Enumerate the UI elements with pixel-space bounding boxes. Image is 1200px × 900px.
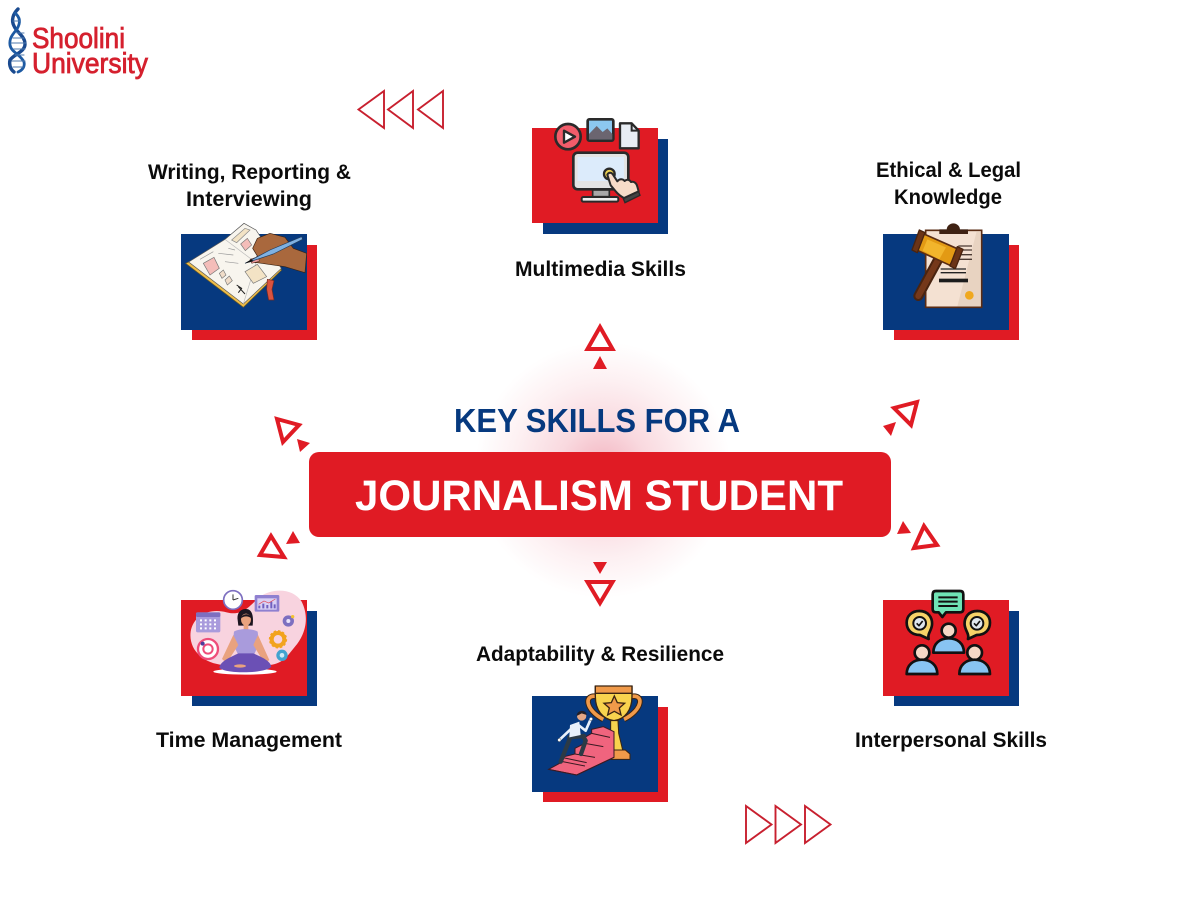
- card back: [543, 139, 668, 234]
- arrows: top-left triple chevrons: [358, 91, 443, 128]
- logo: Shoolini University: [10, 9, 148, 80]
- card front: [532, 696, 658, 792]
- panel: Ethical and Legal Knowledge: [876, 159, 1021, 340]
- arrow: down-right to Interpersonal Skills: [897, 521, 937, 548]
- icon: DNA helix: [10, 9, 26, 72]
- arrow: up to Multimedia Skills: [588, 327, 612, 369]
- panel: Writing, Reporting and Interviewing: [148, 161, 351, 340]
- heading: Time Management: Time Management: [156, 729, 342, 752]
- panel: Interpersonal Skills: [855, 591, 1047, 752]
- logo wordmark: Shoolini: [32, 23, 125, 55]
- arrow: up-right to Ethical and Legal Knowledge: [883, 402, 917, 436]
- arrow: down to Adaptability and Resilience: [588, 562, 612, 603]
- card front: [181, 600, 307, 696]
- logo wordmark: [32, 23, 148, 80]
- arrows: bottom-right triple chevrons: [746, 806, 830, 843]
- icon: media files and touch screen monitor: [555, 119, 640, 203]
- arrow: down-left to Time Management: [260, 531, 300, 557]
- card back: [894, 245, 1019, 340]
- heading: KEY SKILLS FOR A: KEY SKILLS FOR A: [454, 402, 740, 439]
- card front: [181, 234, 307, 330]
- icon: gavel and legal clipboard: [912, 223, 982, 307]
- card front: [883, 234, 1009, 330]
- heading: Writing, Reporting and Interviewing: Writing, Reporting &: [148, 161, 351, 184]
- panel: Adaptability and Resilience: [476, 643, 724, 802]
- panel: Time Management: [156, 591, 342, 752]
- heading: Writing, Reporting and Interviewing: [148, 161, 351, 211]
- logo wordmark: University: [32, 48, 148, 80]
- banner background: [309, 452, 891, 537]
- card back: [543, 707, 668, 802]
- banner text: JOURNALISM STUDENT: [355, 472, 843, 520]
- icon: person climbing stairs to trophy: [549, 686, 640, 775]
- heading: Ethical and Legal Knowledge: Ethical & Legal: [876, 159, 1021, 182]
- card front: [532, 128, 658, 223]
- icon: notebook and writing hand: [186, 223, 307, 307]
- heading: Adaptability and Resilience: Adaptability & Resilience: [476, 643, 724, 666]
- heading: Multimedia Skills: Multimedia Skills: [515, 258, 686, 281]
- heading: Interpersonal Skills: Interpersonal Skills: [855, 729, 1047, 752]
- panel: Multimedia Skills: [515, 119, 686, 281]
- card back: [894, 611, 1019, 706]
- heading: Writing, Reporting and Interviewing: Interviewing: [186, 188, 312, 211]
- heading: Ethical and Legal Knowledge: [876, 159, 1021, 209]
- heading: Ethical and Legal Knowledge: Knowledge: [894, 186, 1002, 209]
- glow: central radial highlight: [475, 342, 731, 598]
- arrow: up-left to Writing, Reporting and Interviewing: [277, 419, 310, 452]
- icon: woman meditating with schedule items: [190, 591, 306, 675]
- card front: [883, 600, 1009, 696]
- card back: [192, 245, 317, 340]
- title banner: JOURNALISM STUDENT: [309, 452, 891, 537]
- icon: three people with speech bubbles: [907, 591, 990, 674]
- card back: [192, 611, 317, 706]
